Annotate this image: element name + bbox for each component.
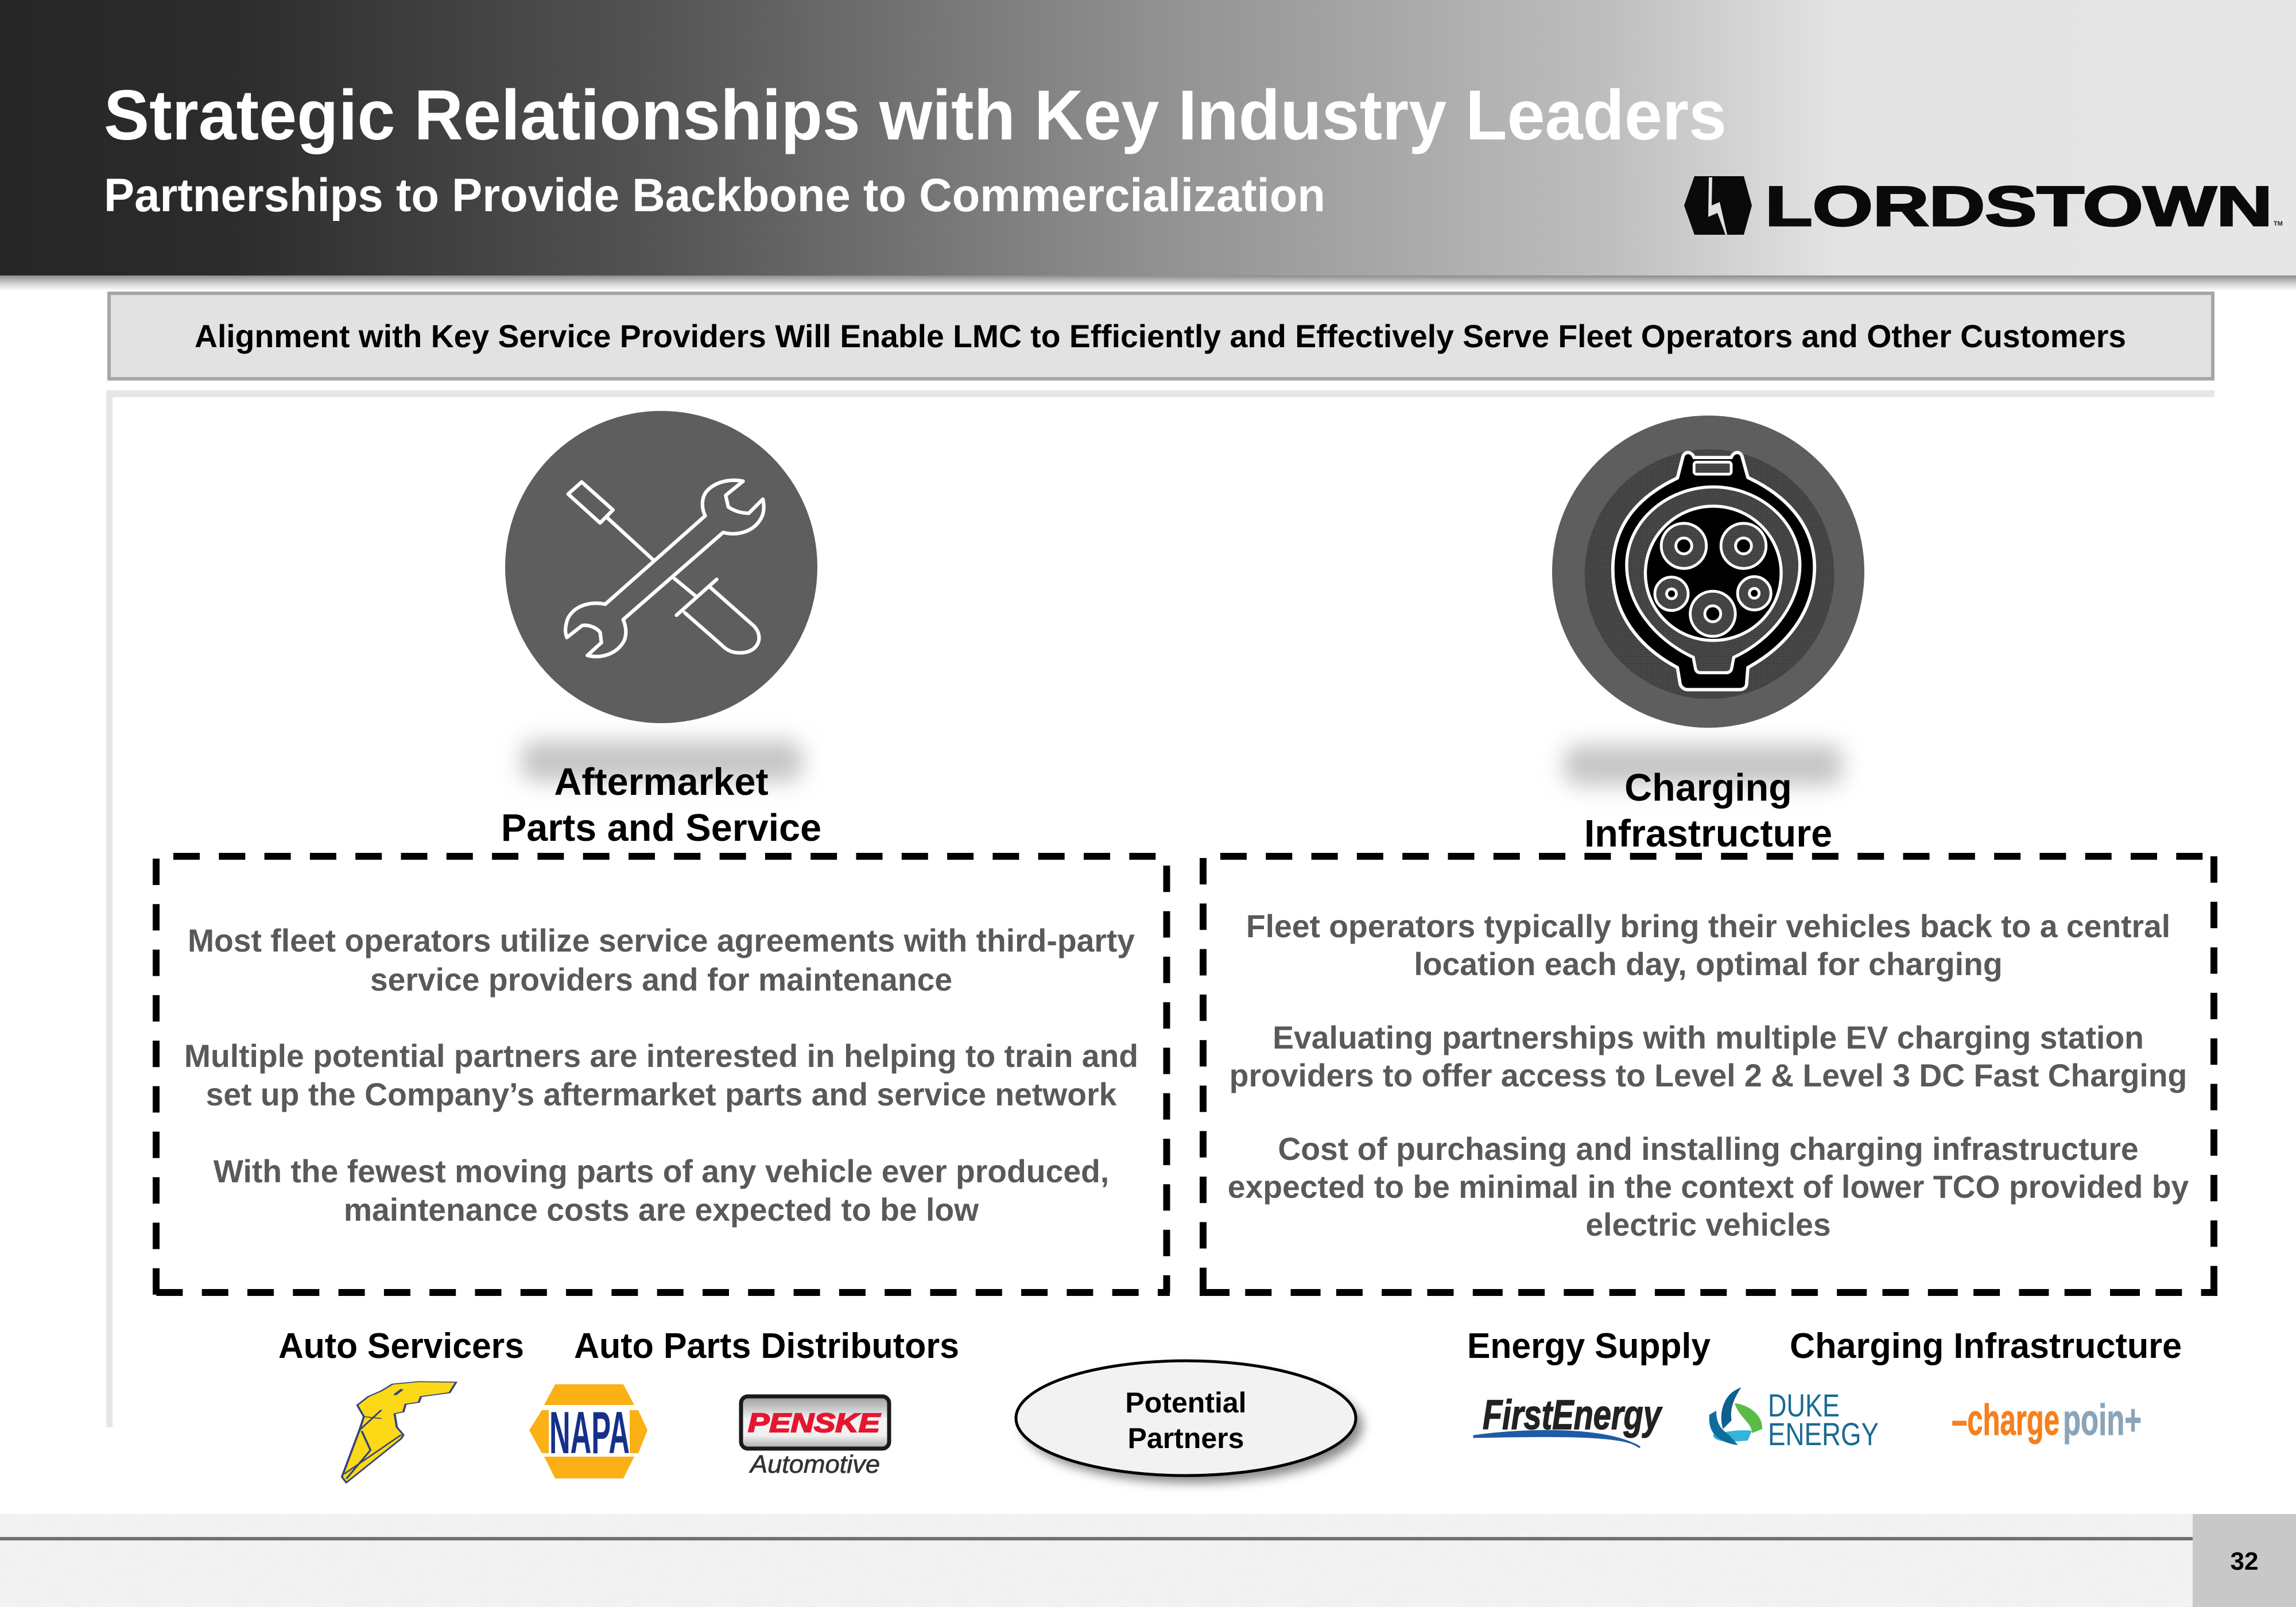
text block: service points: Multiple potential partners are interested in helping to train and <box>184 1038 1138 1074</box>
callout: potential partners <box>1016 1361 1363 1483</box>
panel: aftermarket parts and service <box>153 411 1170 1296</box>
text block: charging points: electric vehicles <box>1585 1207 1831 1243</box>
callout: potential partners: Potential <box>1125 1387 1247 1419</box>
text block: service points: set up the Company’s aftermarket parts and service network <box>206 1077 1117 1112</box>
banner: Alignment with Key Service Providers Will Enable LMC to Efficiently and Effectively Serve Fleet Operators and Other Customers <box>195 318 2126 354</box>
dashed box <box>1200 856 2217 1296</box>
content frame strip <box>106 390 2214 1427</box>
icon: charging connector <box>1552 416 1864 728</box>
logo: ChargePoint: poin+ <box>2063 1396 2142 1445</box>
logo: Penske Automotive: Automotive <box>748 1450 880 1478</box>
text block: service points: service providers and for maintenance <box>370 962 952 997</box>
partner group headings: Auto Servicers <box>278 1326 524 1366</box>
text block: service points: With the fewest moving parts of any vehicle ever produced, <box>214 1154 1109 1189</box>
panel: charging infrastructure <box>1200 416 2217 1296</box>
heading: Aftermarket <box>554 761 769 804</box>
text block: charging points: Evaluating partnerships with multiple EV charging station <box>1273 1020 2144 1055</box>
logo: Lordstown: LORDSTOWN <box>1765 174 2272 238</box>
partner group headings: Energy Supply <box>1467 1326 1711 1366</box>
footer <box>0 1514 2296 1607</box>
text block: charging points <box>1228 909 2189 1243</box>
heading: Parts and Service <box>501 807 821 849</box>
partner group headings: Charging Infrastructure <box>1790 1326 2182 1366</box>
icon: wrench and screwdriver <box>505 411 817 723</box>
logo: FirstEnergy: FirstEnergy <box>1483 1392 1663 1438</box>
text block: charging points: Fleet operators typically bring their vehicles back to a central <box>1246 909 2170 944</box>
logo: Duke Energy: ENERGY <box>1768 1416 1879 1452</box>
header band <box>0 0 2296 291</box>
icon: plug shadow <box>1564 744 1843 786</box>
logo: FirstEnergy <box>1474 1392 1663 1447</box>
logo: Duke Energy: DUKE <box>1768 1387 1840 1423</box>
heading <box>1584 767 1832 855</box>
heading <box>501 761 821 849</box>
text block: service points: maintenance costs are expected to be low <box>344 1192 979 1228</box>
partner group headings: Auto Parts Distributors <box>574 1326 959 1366</box>
icon: tools shadow <box>521 740 802 782</box>
logo: Penske Automotive: PENSKE <box>748 1408 881 1438</box>
heading: Charging <box>1624 767 1792 809</box>
logo: NAPA: NAPA <box>549 1400 630 1466</box>
banner <box>109 293 2213 379</box>
text block: charging points: expected to be minimal in the context of lower TCO provided by <box>1228 1169 2189 1205</box>
subtitle: Partnerships to Provide Backbone to Commercialization <box>104 169 1325 222</box>
text block: charging points: Cost of purchasing and installing charging infrastructure <box>1278 1131 2139 1167</box>
text block: service points: Most fleet operators utilize service agreements with third-party <box>188 923 1135 958</box>
page number <box>2193 1514 2296 1607</box>
logo: NAPA <box>529 1384 647 1478</box>
logo: Goodyear winged foot <box>342 1381 456 1482</box>
logo: Penske Automotive <box>741 1396 889 1478</box>
title: Strategic Relationships with Key Industry Leaders <box>104 76 1727 155</box>
dashed box <box>153 856 1170 1296</box>
heading: Infrastructure <box>1584 813 1832 855</box>
logo: Lordstown <box>1684 174 2283 238</box>
logo: Duke Energy <box>1709 1387 1879 1452</box>
logo: Lordstown: TM <box>2274 220 2283 227</box>
logo: ChargePoint: –charge <box>1952 1396 2060 1445</box>
text block: service points <box>184 923 1138 1228</box>
partner group headings <box>278 1326 2182 1366</box>
text block: charging points: location each day, optimal for charging <box>1414 946 2003 982</box>
text block: charging points: providers to offer access to Level 2 & Level 3 DC Fast Charging <box>1230 1058 2187 1093</box>
page number: 32 <box>2231 1547 2258 1575</box>
callout: potential partners: Partners <box>1128 1422 1244 1454</box>
